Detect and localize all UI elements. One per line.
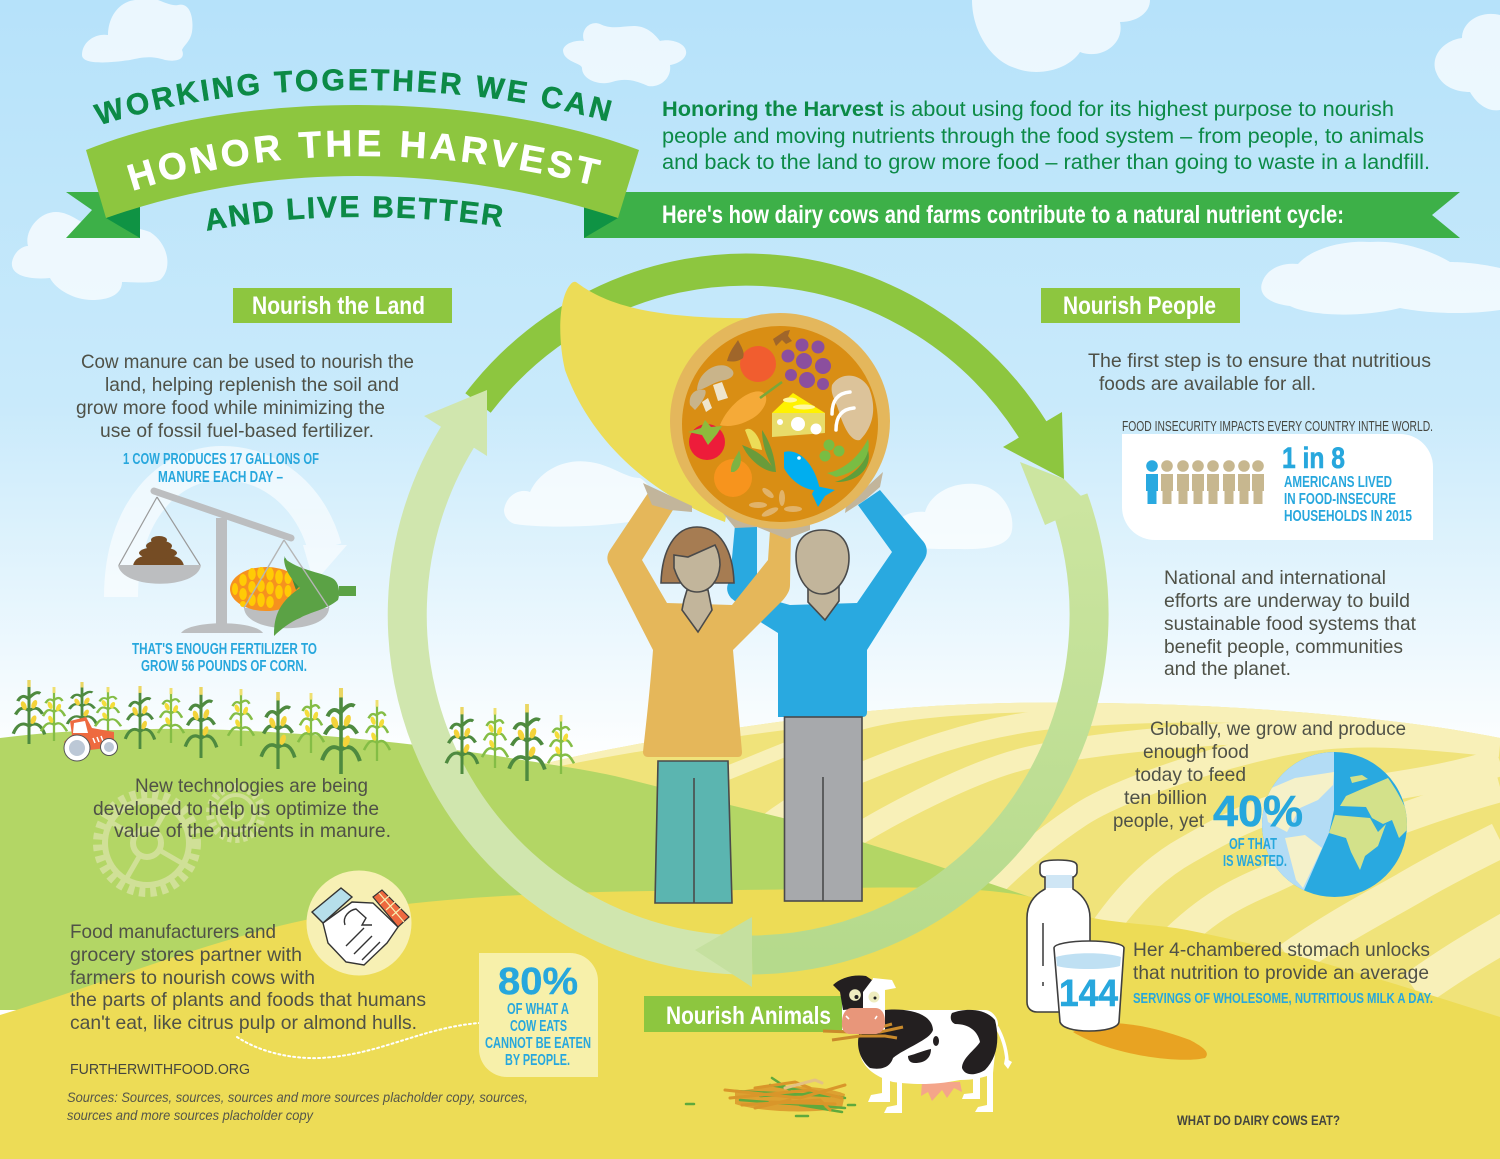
stat: fertilizer for corn: THAT'S ENOUGH FERTILIZER TO: [132, 641, 317, 658]
text: cow manure: grow more food while minimizing the: [76, 397, 385, 419]
shadow under glass: [1073, 1023, 1207, 1060]
text: food manufacturers: can't eat, like citrus pulp or almond hulls.: [70, 1012, 417, 1034]
section label: nourish animals: Nourish Animals: [666, 1002, 831, 1030]
legs: [868, 1060, 993, 1113]
man shirt and arms: [727, 490, 927, 717]
text: globally: people, yet: [1113, 810, 1205, 832]
text: stomach: that nutrition to provide an average: [1133, 962, 1429, 984]
woman hair and head: [661, 527, 734, 632]
stat: fertilizer for corn: [132, 641, 317, 675]
text: national efforts: benefit people, communities: [1164, 636, 1403, 658]
icon: row of people: [1146, 460, 1264, 504]
man pants: [784, 717, 862, 901]
stat: 40 percent: [1213, 787, 1303, 870]
callout: 80 percent: 80%: [498, 961, 578, 1003]
icon: glass of milk: 144: [1059, 973, 1118, 1015]
text: national efforts: [1164, 567, 1417, 680]
intro paragraph: and back to the land to grow more food – rather than going to waste in a landfill.: [662, 151, 1430, 174]
bread: [832, 376, 873, 440]
text: globally: Globally, we grow and produce: [1150, 718, 1406, 740]
fish: [784, 451, 835, 507]
hands holding horn: [643, 472, 883, 539]
hay in mouth: [823, 1024, 903, 1040]
callout: 80 percent: [479, 953, 598, 1077]
tail: [997, 1027, 1007, 1060]
stat: 40 percent: 40%: [1213, 787, 1303, 836]
sources: sources and more sources placholder copy: [67, 1107, 314, 1123]
horn mouth rim: [670, 313, 890, 529]
text: food manufacturers: [70, 921, 426, 1034]
cinnamon stick: [773, 330, 792, 346]
text: food manufacturers: the parts of plants and foods that humans: [70, 989, 426, 1011]
text: cow manure: Cow manure can be used to nourish the: [81, 351, 414, 373]
woman pants: [655, 761, 732, 903]
cheese: [772, 393, 825, 437]
tomato: [688, 420, 725, 460]
title banner: [66, 69, 1460, 238]
stat: 40 percent: IS WASTED.: [1223, 853, 1287, 870]
icon: hay pile: [686, 1078, 855, 1116]
eyes: [849, 989, 880, 1002]
ear of corn: [742, 429, 776, 472]
land masses left: [1262, 772, 1334, 888]
panel: 1 in 8: [1122, 434, 1433, 540]
peas: [820, 439, 869, 482]
man neck and head: [796, 530, 849, 620]
stat label: IN FOOD-INSECURE: [1284, 491, 1396, 508]
leaf sprig: [727, 340, 744, 362]
ribbon subheading: Here's how dairy cows and farms contribute to a natural nutrient cycle:: [662, 201, 1344, 229]
text: stomach: [1133, 939, 1433, 1007]
callout: 80 percent: CANNOT BE EATEN: [485, 1035, 591, 1052]
icon: handshake: [306, 870, 412, 976]
background: striped yellow field: [545, 702, 1500, 1017]
text: cow manure: land, helping replenish the soil and: [105, 374, 399, 396]
icon: cycle arrow behind scale: [121, 463, 347, 597]
text: first step: [1088, 350, 1431, 395]
icon: globe: [1262, 752, 1407, 897]
horn interior: [682, 326, 878, 522]
stat: 1 in 8: 1 in 8: [1282, 442, 1345, 475]
icon: milk bottle: [1027, 860, 1090, 1012]
muzzle: [842, 1008, 885, 1034]
body patches: [858, 1010, 997, 1074]
icon: cow: [823, 975, 1012, 1113]
head: [842, 980, 885, 1030]
icon: balance scale with manure and corn: [118, 491, 356, 636]
stat label: [1284, 474, 1412, 525]
nutrient cycle ring: [407, 270, 1090, 987]
section label: nourish people: Nourish People: [1063, 292, 1216, 320]
text: national efforts: sustainable food systems that: [1164, 613, 1417, 635]
text: new technologies: value of the nutrients in manure.: [114, 820, 391, 842]
text: national efforts: efforts are underway to build: [1164, 590, 1410, 612]
banner tails: [66, 192, 1460, 238]
woman shirt and arms: [607, 490, 791, 757]
intro paragraph: people and moving nutrients through the food system – from people, to animals: [662, 125, 1424, 148]
corn rows: [13, 680, 574, 781]
intro paragraph: [662, 98, 1430, 174]
scale beam: [154, 491, 291, 538]
text: food manufacturers: farmers to nourish cows with: [70, 967, 315, 989]
icon: gears: [90, 786, 262, 900]
section label: nourish animals: [644, 996, 843, 1032]
food items: [688, 330, 873, 519]
icon: tractor: [64, 717, 118, 761]
callout: 80 percent: OF WHAT A: [507, 1001, 569, 1018]
cornucopia: [560, 282, 890, 539]
stat: 17 gallons of manure: 1 COW PRODUCES 17 GALLONS OF: [123, 451, 319, 468]
text: cow manure: use of fossil fuel-based fertilizer.: [100, 420, 374, 442]
caption: what do dairy cows eat: WHAT DO DAIRY COWS EAT?: [1177, 1112, 1340, 1128]
text: globally: ten billion: [1124, 787, 1207, 809]
arrow: nourish animals to land: [407, 390, 752, 987]
sources: Sources: Sources, sources, sources and more sources placholder copy, sources,: [67, 1089, 528, 1105]
heading line 3: AND LIVE BETTER: [206, 196, 502, 231]
heading line 2: HONOR THE HARVEST: [126, 130, 602, 190]
text: new technologies: New technologies are being: [135, 775, 368, 797]
horn: [560, 282, 760, 522]
figure: man: [727, 490, 927, 901]
stat label: AMERICANS LIVED: [1284, 474, 1392, 491]
udder: [921, 1082, 962, 1101]
callout: 80 percent: COW EATS: [510, 1018, 567, 1035]
stat: 17 gallons of manure: [123, 451, 319, 486]
intro paragraph: Honoring the Harvest is about using food for its highest purpose to nourish: [662, 98, 1394, 121]
text: new technologies: developed to help us optimize the: [93, 798, 379, 820]
text: first step: foods are available for all.: [1099, 373, 1316, 395]
apple: [740, 346, 776, 382]
text: national efforts: and the planet.: [1164, 658, 1291, 680]
mushrooms: [690, 365, 733, 412]
grapes: [782, 338, 831, 390]
section label: nourish the land: Nourish the Land: [252, 292, 425, 320]
stat: 17 gallons of manure: MANURE EACH DAY –: [158, 469, 283, 486]
sources: [67, 1089, 528, 1123]
icon: glass of milk: [1054, 941, 1124, 1031]
text: new technologies: [93, 775, 391, 842]
section label: nourish people: [1041, 288, 1240, 323]
background: yellow ground: [0, 887, 1500, 1159]
orange: [714, 450, 752, 497]
heading line 1: WORKING TOGETHER WE CAN: [92, 69, 612, 124]
text: globally: today to feed: [1135, 764, 1246, 786]
stat label: HOUSEHOLDS IN 2015: [1284, 508, 1412, 525]
text: national efforts: National and international: [1164, 567, 1386, 589]
clouds: [12, 0, 1500, 549]
right pan with corn: [230, 540, 356, 636]
arrow: nourish people to animals: [752, 462, 1090, 955]
text: food manufacturers: Food manufacturers and: [70, 921, 276, 943]
body: [859, 1010, 998, 1084]
banner arc: [86, 105, 639, 218]
text: cow manure: [76, 351, 414, 442]
text: globally: enough food: [1143, 741, 1249, 763]
stat: 40 percent: OF THAT: [1229, 836, 1277, 853]
arrow: nourish land to people: [478, 270, 1064, 479]
text: first step: The first step is to ensure that nutritious: [1088, 350, 1431, 372]
background: green hill: [0, 729, 1036, 1010]
website: FURTHERWITHFOOD.ORG: [70, 1062, 250, 1078]
scale stand: [181, 518, 263, 633]
callout: 80 percent: BY PEOPLE.: [505, 1052, 570, 1069]
stat: fertilizer for corn: GROW 56 POUNDS OF CORN.: [141, 658, 307, 675]
text: stomach: Her 4-chambered stomach unlocks: [1133, 939, 1430, 961]
wheat: [749, 486, 802, 519]
land masses right: [1329, 775, 1412, 870]
left pan with manure: [118, 497, 201, 584]
carrot: [720, 382, 782, 426]
figure: woman: [607, 490, 791, 903]
text: food manufacturers: grocery stores partner with: [70, 944, 302, 966]
dotted connector: [237, 1023, 479, 1058]
text: globally: [1113, 718, 1406, 832]
